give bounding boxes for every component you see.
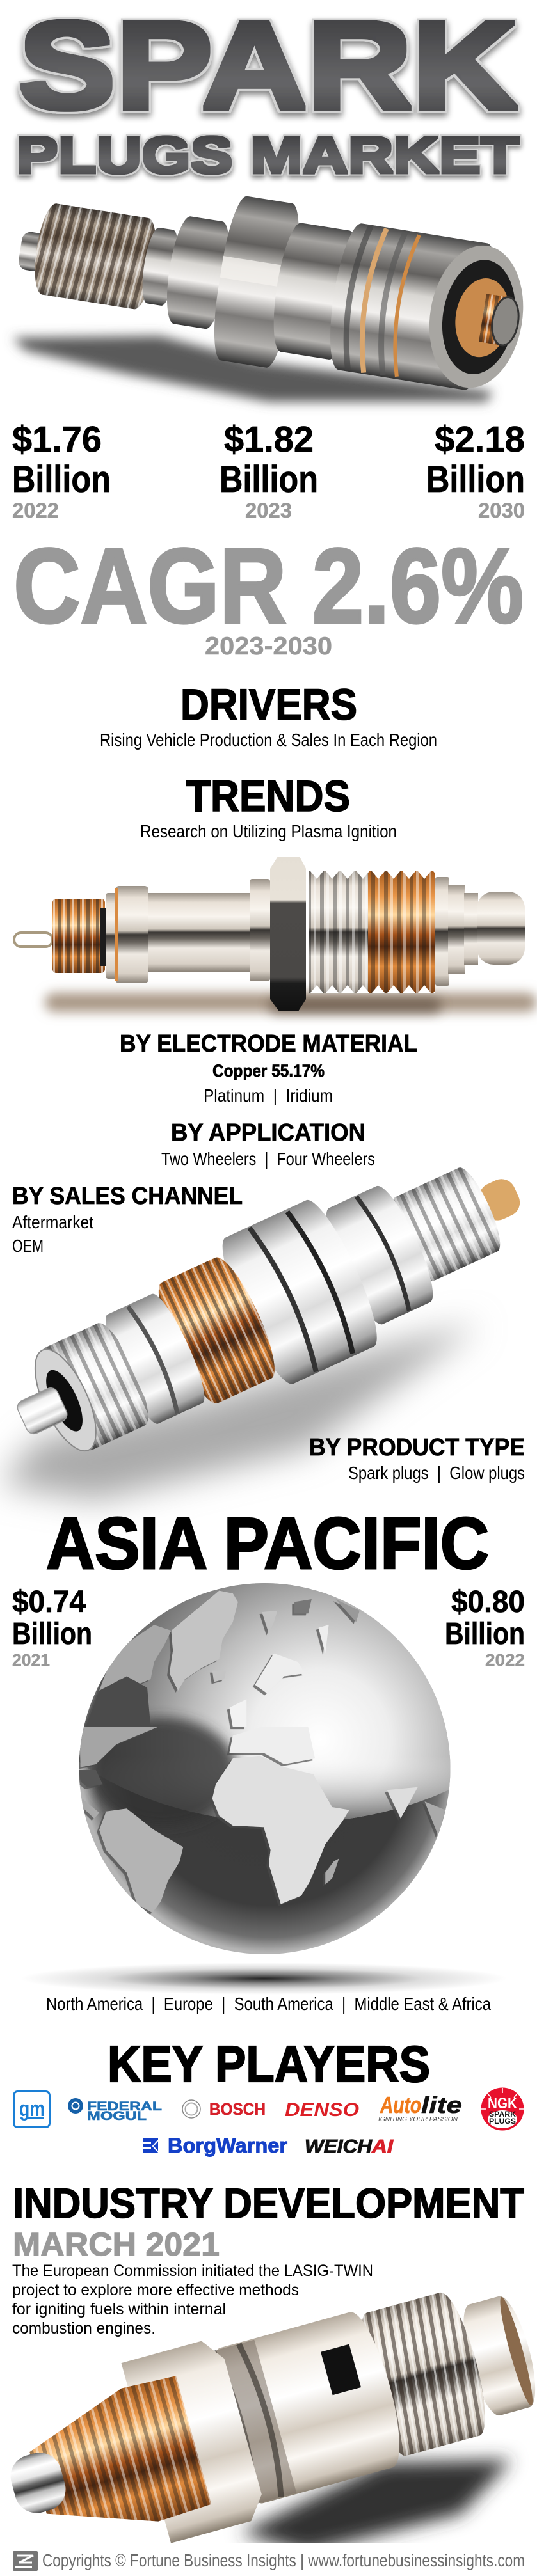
value: $2.18: [435, 419, 525, 460]
stat: 2022 region value: [445, 1585, 525, 1670]
value: $1.76: [12, 419, 102, 460]
logo: Autolite: IGNITING YOUR PASSION: [378, 2116, 458, 2123]
segment: electrode material: [120, 1031, 417, 1105]
item: aftermarket: Aftermarket: [12, 1212, 93, 1232]
CAGR period: 2023-2030: [205, 633, 332, 660]
value: $1.82: [224, 419, 314, 460]
logo: Federal Mogul: [68, 2098, 162, 2123]
logo: Federal Mogul: FEDERAL: [87, 2100, 162, 2114]
unit: Billion: [12, 1617, 92, 1651]
trends text: Research on Utilizing Plasma Ignition: [140, 821, 397, 841]
logo: BorgWarner: BorgWarner: [168, 2134, 287, 2157]
continents south: [79, 1727, 445, 1913]
heading: BY SALES CHANNEL: [12, 1183, 243, 1210]
year: 2021: [12, 1650, 50, 1670]
stat: 2030: [426, 419, 525, 522]
unit: Billion: [426, 459, 525, 500]
value: $0.80: [451, 1585, 525, 1619]
logo: Federal Mogul: MOGUL: [87, 2110, 147, 2123]
logo: NGK: NGK: [488, 2095, 518, 2112]
image: spark plug 4: [11, 2293, 535, 2543]
value: $0.74: [12, 1585, 86, 1619]
title line: Spark: SPARK: [19, 0, 517, 135]
development description: The European Commission initiated the LASIG-TWIN: [12, 2262, 373, 2280]
logo: Autolite: lite: [421, 2092, 462, 2118]
logo: Denso: DENSO: [285, 2099, 359, 2121]
development description: [12, 2262, 373, 2337]
title line: Plugs Market: PLUGS MARKET: [16, 127, 519, 184]
heading: BY PRODUCT TYPE: [309, 1434, 525, 1461]
logo: Bosch: BOSCH: [209, 2099, 266, 2119]
icon: publisher logo: [13, 2551, 38, 2571]
image: spark plug 2: [14, 857, 537, 1013]
items: Platinum | Iridium: [204, 1086, 333, 1105]
logo: Bosch: [182, 2099, 266, 2119]
region heading: ASIA PACIFIC: [46, 1503, 489, 1584]
logo: NGK: PLUGS: [489, 2117, 516, 2126]
unit: Billion: [220, 459, 318, 500]
stat: 2023: [220, 419, 318, 522]
leading value: Copper 55.17%: [212, 1061, 325, 1080]
year: 2022: [485, 1650, 525, 1670]
segment: sales channel: [12, 1183, 243, 1256]
year: 2023: [245, 499, 292, 522]
image: spark plug 3: [0, 1119, 537, 1500]
logo: NGK: [481, 2088, 524, 2130]
logo: GM: gm: [19, 2097, 45, 2121]
logo: Weichai: [305, 2137, 394, 2157]
footer: [13, 2550, 525, 2571]
logo: GM: [14, 2092, 50, 2128]
drivers text: Rising Vehicle Production & Sales In Each Region: [100, 730, 437, 750]
unit: Billion: [12, 459, 111, 500]
year: 2022: [12, 499, 59, 522]
heading: BY APPLICATION: [171, 1119, 365, 1146]
logo: Autolite: Auto: [380, 2092, 421, 2118]
item: OEM: OEM: [12, 1236, 44, 1256]
items: Two Wheelers | Four Wheelers: [161, 1149, 375, 1169]
icon: globe: [79, 1583, 451, 1954]
globe shadow: [20, 1963, 507, 1995]
image: spark plug 1: [8, 162, 535, 406]
logo: Weichai: AI: [371, 2137, 394, 2157]
segment: application: [161, 1119, 375, 1169]
development description: combustion engines.: [12, 2319, 156, 2337]
development description: project to explore more effective methods: [12, 2281, 299, 2299]
date: MARCH 2021: [13, 2226, 220, 2263]
stat: 2022: [12, 419, 111, 522]
title: [16, 0, 519, 184]
year: 2030: [478, 499, 525, 522]
heading: BY ELECTRODE MATERIAL: [120, 1031, 417, 1057]
logo: Weichai: WEICH: [305, 2137, 373, 2157]
trends heading: TRENDS: [186, 771, 350, 821]
logo: NGK: SPARK: [489, 2110, 516, 2119]
unit: Billion: [445, 1617, 525, 1651]
logo: Autolite: [378, 2092, 462, 2123]
segment: product type: [309, 1434, 525, 1483]
key players heading: KEY PLAYERS: [108, 2035, 430, 2092]
development description: for igniting fuels within internal: [12, 2300, 226, 2318]
drivers heading: DRIVERS: [180, 680, 357, 729]
stat: 2021 region value: [12, 1585, 92, 1670]
continents north: [86, 1591, 360, 1727]
